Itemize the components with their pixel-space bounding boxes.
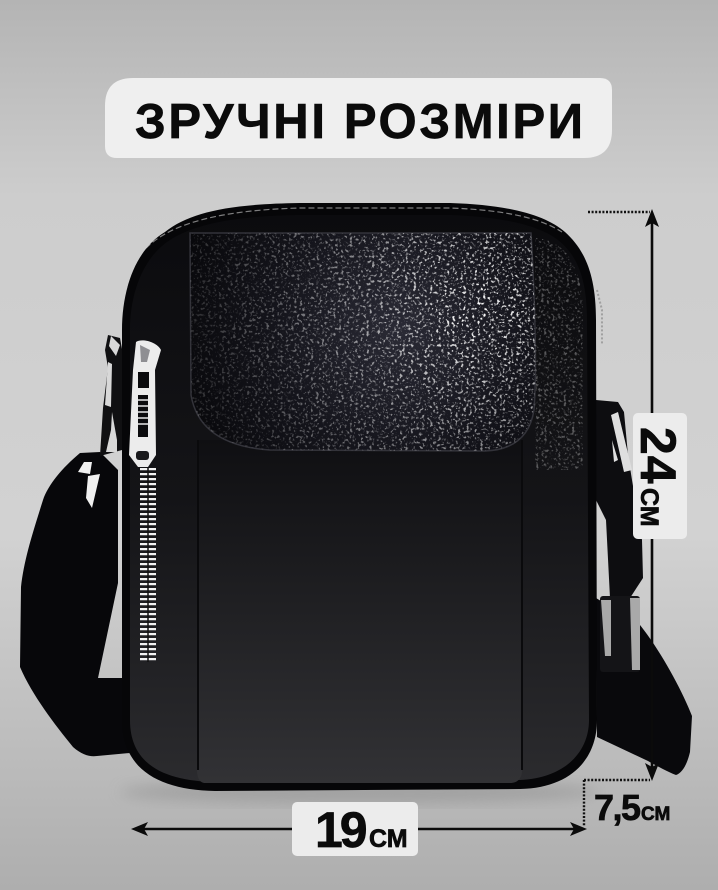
leather flap xyxy=(186,228,538,454)
top zip highlight xyxy=(140,208,562,255)
floor shadow xyxy=(120,780,600,804)
bag body xyxy=(122,203,597,791)
depth dotted guide xyxy=(584,780,650,826)
right strap and buckles xyxy=(596,400,692,775)
lower buckle xyxy=(600,596,640,672)
width dimension: 19 cm xyxy=(131,802,587,858)
left clasp xyxy=(100,335,124,456)
title text: ЗРУЧНІ РОЗМІРИ xyxy=(135,95,583,149)
title xyxy=(105,78,612,158)
zipper teeth xyxy=(140,468,156,662)
zipper pull xyxy=(129,340,161,467)
right side leather xyxy=(535,238,585,470)
depth label: СМ xyxy=(641,804,670,825)
width label xyxy=(292,802,418,858)
depth label: 7,5 xyxy=(594,787,641,828)
title pill xyxy=(105,78,612,158)
height dimension: 24 cm xyxy=(588,209,687,781)
width arrow xyxy=(131,822,587,836)
height label xyxy=(630,413,687,539)
panel seams xyxy=(198,440,522,770)
lower front panel xyxy=(197,440,522,783)
left strap xyxy=(20,335,130,756)
height label: 24 xyxy=(630,427,686,485)
height arrow xyxy=(645,209,659,781)
height label: СМ xyxy=(635,488,663,527)
depth dimension: 7,5 cm xyxy=(584,780,670,828)
width label: 19 xyxy=(315,802,366,858)
width label: СМ xyxy=(369,825,408,853)
bag illustration xyxy=(20,203,692,804)
height top dotted guide xyxy=(588,211,650,213)
depth label xyxy=(594,787,670,828)
inner bag fill xyxy=(130,215,589,782)
